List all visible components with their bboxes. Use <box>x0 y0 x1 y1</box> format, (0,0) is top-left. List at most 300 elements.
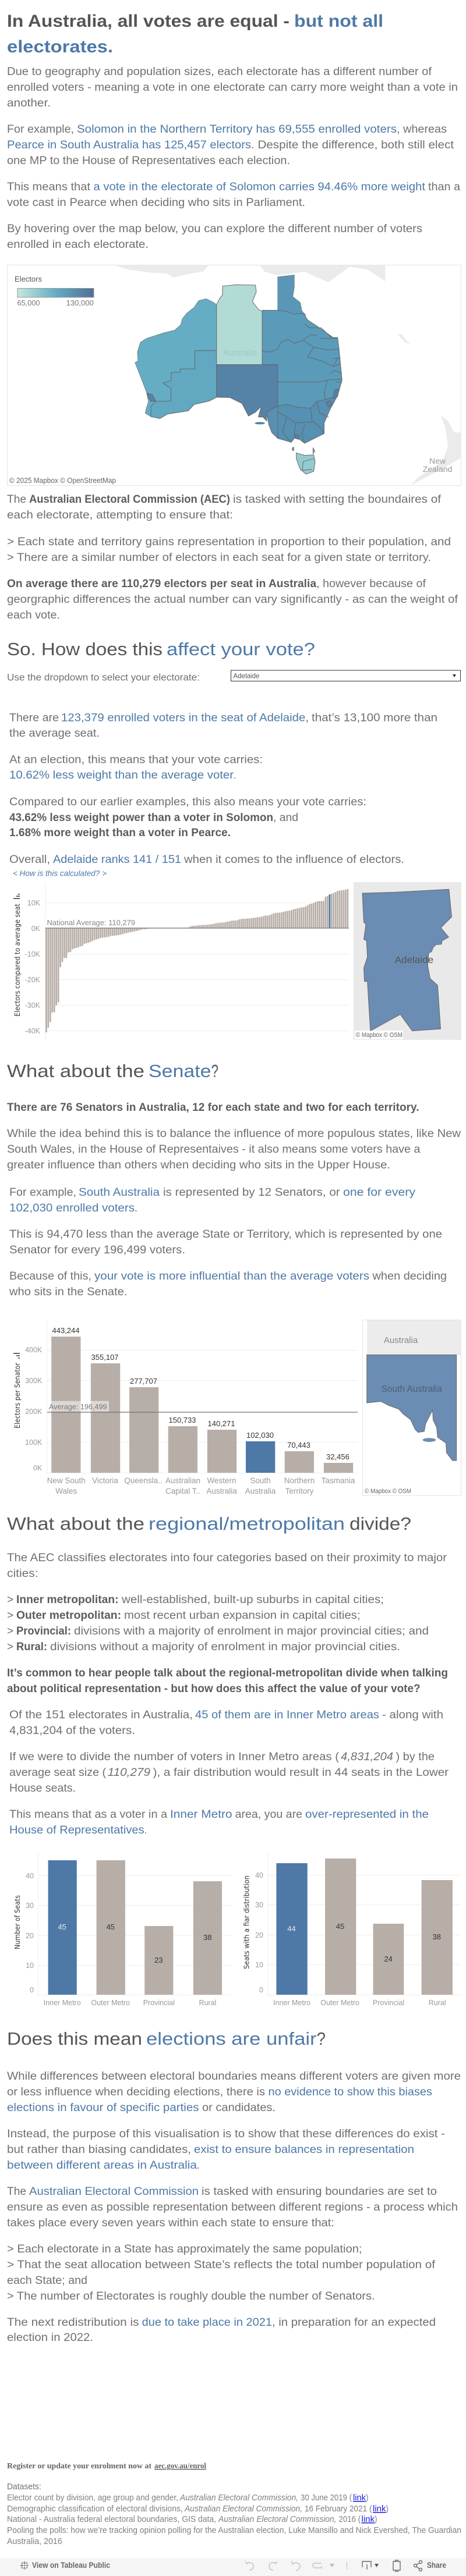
datasets list: Australia, 2016 <box>7 2536 62 2546</box>
enrolled voters text: There are <box>9 712 59 724</box>
y axis ticks: 400K <box>25 1346 43 1354</box>
average line and label: Average: 196,499 <box>49 1402 107 1411</box>
intro paragraph: enrolled voters - meaning a vote in one electorate can carry more weight than a vote in <box>7 81 458 94</box>
side map: Adelaide electorate: © Mapbox © OSM <box>356 1032 403 1039</box>
heading: regional/metropolitan <box>7 1513 411 1534</box>
AEC task paragraph: takes place every seven years within each state to ensure that: <box>7 2217 334 2229</box>
title: but not all <box>294 12 383 31</box>
heading: elections unfair: ? <box>317 2028 326 2049</box>
over-represented text: over-represented in the <box>305 1808 429 1821</box>
value labels: 38 <box>203 1933 212 1942</box>
balance paragraph: While the idea behind this is to balance the influence of more populous states, like New <box>7 1128 461 1140</box>
datasets list: Elector count by division, age group and gender, <box>7 2493 178 2503</box>
South Australia example: 102,030 enrolled voters <box>9 1202 135 1214</box>
x axis labels: Inner Metro <box>273 1999 310 2007</box>
heading: elections unfair: Does this mean <box>7 2028 142 2049</box>
map labels: Australia <box>223 348 257 358</box>
view on tableau public: View on Tableau Public <box>32 2560 110 2570</box>
x axis labels: Capital T.. <box>165 1487 200 1495</box>
no evidence paragraph <box>7 2070 461 2114</box>
datasets list: Australian Electoral Commission, <box>179 2493 298 2503</box>
side map: South Australia: © Mapbox © OSM <box>365 1488 411 1495</box>
value labels: 102,030 <box>246 1431 274 1440</box>
no evidence paragraph: no evidence to show this biases <box>268 2086 432 2098</box>
heading: regional/metropolitan: regional/metropolitan <box>149 1513 345 1534</box>
categories list: Inner metropolitan: <box>16 1594 119 1606</box>
heading: elections unfair: elections are unfair <box>146 2028 317 2049</box>
y axis title: Number of Seats <box>13 1895 22 1949</box>
icon: tableau logo <box>20 2561 29 2570</box>
categories intro: The AEC classifies electorates into four categories based on their proximity to major <box>7 1552 447 1564</box>
comparison text: Compared to our earlier examples, this also means your vote carries: <box>9 796 366 808</box>
value labels: 150,733 <box>169 1416 196 1424</box>
y axis title: Electors compared to average seat <box>13 904 22 1017</box>
categories list: > <box>7 1641 13 1653</box>
x axis labels: Australia <box>245 1487 276 1495</box>
heading: Senate: Senate <box>149 1061 211 1081</box>
x axis labels: Provincial <box>143 1999 175 2007</box>
national average line <box>45 928 349 929</box>
WA north and coast <box>135 299 217 418</box>
side map: South Australia: South Australia <box>382 1384 442 1394</box>
heading: Senate: What about the <box>7 1061 144 1081</box>
South Australia example: . <box>135 1202 137 1214</box>
map: electors by electorate: Zealand <box>423 464 452 474</box>
heading: regional/metropolitan: What about the <box>7 1513 144 1534</box>
x axis labels: Tasmania <box>322 1476 355 1485</box>
purpose paragraph: Instead, the purpose of this visualisation is to show that these differences do exist - <box>7 2128 445 2140</box>
AEC paragraph: is tasked with setting the boundaires of <box>233 493 442 506</box>
categories list: Outer metropolitan: <box>16 1609 121 1622</box>
y axis ticks: 300K <box>25 1377 43 1385</box>
y axis ticks: 20 <box>26 1932 34 1940</box>
South Australia example: one for every <box>343 1186 416 1199</box>
y axis ticks: 100K <box>25 1438 43 1447</box>
weight paragraph: This means that <box>7 181 91 193</box>
x axis labels: Australia <box>206 1487 237 1495</box>
categories list: divisions with a majority of enrolment in major provincial cities; and <box>74 1625 429 1637</box>
datasets list: 2016 ( <box>339 2514 361 2524</box>
y axis ticks: -20K <box>25 976 41 984</box>
categories list: Provincial: <box>16 1625 71 1637</box>
dropdown <box>231 670 460 681</box>
senators bold text: There are 76 Senators in Australia, 12 for each state and two for each territory. <box>7 1102 419 1114</box>
influence text: Because of this, <box>9 1270 91 1282</box>
map: electors by electorate <box>7 265 461 485</box>
value labels: 277,707 <box>130 1377 157 1385</box>
heading: affect your vote <box>7 639 315 659</box>
x axis labels: Northern <box>284 1476 315 1485</box>
average line and label <box>47 1401 358 1412</box>
y axis title: Seats with a fiar distribution <box>242 1875 250 1969</box>
purpose paragraph: exist to ensure balances in representation <box>194 2144 414 2156</box>
value labels <box>58 1923 212 1964</box>
regional divide question: It’s common to hear people talk about the regional-metropolitan divide when talking <box>7 1667 448 1679</box>
intro paragraph: Due to geography and population sizes, each electorate has a different number of <box>7 66 432 78</box>
x axis labels: South <box>250 1476 271 1485</box>
AEC paragraph <box>7 493 442 521</box>
side map: South Australia: Australia <box>384 1335 418 1345</box>
value labels: 23 <box>154 1956 163 1964</box>
influence text: when deciding <box>372 1270 447 1282</box>
chart: electors compared to average seat <box>13 882 349 1040</box>
value labels: 45 <box>336 1922 344 1931</box>
datasets list: Demographic classification of electoral divisions, <box>7 2504 183 2514</box>
redistribution list: > That the seat allocation between State’s reflects the total number population of <box>7 2259 436 2271</box>
title: In Australia, all votes are equal - <box>7 12 290 31</box>
bars <box>48 1860 222 1995</box>
Tasmania <box>296 453 315 474</box>
value labels: 24 <box>384 1955 393 1963</box>
value labels <box>52 1326 350 1461</box>
balance paragraph: greater influence than others when deciding who sits in the Upper House. <box>7 1159 390 1171</box>
categories intro <box>7 1552 447 1580</box>
fair distribution text: House seats. <box>9 1782 76 1795</box>
example paragraph: , whereas <box>397 123 447 136</box>
y axis ticks: 40 <box>26 1872 34 1880</box>
icon: share <box>414 2560 422 2571</box>
enrolled voters text: that’s 13,100 more than <box>312 712 437 724</box>
value labels <box>287 1922 441 1963</box>
y axis ticks: 10 <box>26 1962 34 1970</box>
AEC task paragraph: Australian Electoral Commission <box>29 2186 199 2198</box>
average state text: This is 94,470 less than the average State or Territory, which is represented by one <box>9 1228 442 1241</box>
map: electors by electorate: New <box>429 456 446 466</box>
heading: affect your vote: So. How does this <box>7 639 163 659</box>
rank text: Adelaide ranks 141 / 151 <box>53 854 181 866</box>
rank text: when it comes to the influence of electors. <box>183 854 404 866</box>
x axis labels: Western <box>207 1476 236 1485</box>
value labels: 355,107 <box>91 1353 119 1362</box>
redistribution list: each State; and <box>7 2275 87 2287</box>
vote weight text <box>9 754 263 781</box>
icon: refresh <box>313 2563 322 2568</box>
categories list: well-established, built-up suburbs in capital cities; <box>121 1594 384 1606</box>
sort icon <box>13 1353 20 1359</box>
sort icon <box>13 894 20 899</box>
South Australia example: South Australia <box>79 1186 160 1199</box>
AEC task paragraph <box>7 2186 458 2229</box>
bars <box>276 1859 453 1995</box>
hover paragraph <box>7 223 422 251</box>
datasets list: ) <box>386 2504 389 2514</box>
chart: number of seats <box>13 1852 232 2007</box>
value labels: 70,443 <box>287 1441 310 1449</box>
map: electors by electorate: © 2025 Mapbox © OpenStreetMap <box>9 477 116 485</box>
datasets list: ) <box>366 2493 368 2503</box>
y axis title: Electors per Senator <box>13 1363 22 1429</box>
y axis ticks <box>25 899 41 1035</box>
next redistribution paragraph: election in 2022. <box>7 2332 93 2344</box>
icon: dropdown arrow <box>330 2564 334 2567</box>
y axis ticks <box>255 1871 263 1994</box>
AEC paragraph: The <box>7 493 26 506</box>
enrolled voters text <box>9 712 437 740</box>
purpose paragraph: but rather than biasing candidates, <box>7 2144 191 2156</box>
datasets list: link <box>353 2493 366 2503</box>
AEC criteria list: > There are a similar number of electors in each seat for a given state or territory. <box>7 552 431 564</box>
side map: Adelaide electorate <box>354 882 461 1040</box>
categories list <box>7 1594 429 1653</box>
over-represented text: . <box>144 1824 147 1836</box>
average state text: Senator for every 196,499 voters. <box>9 1244 185 1256</box>
share label: Share <box>427 2560 446 2570</box>
example paragraph: Solomon in the Northern Territory has 69,555 enrolled voters <box>77 123 397 136</box>
over-represented text: House of Representatives <box>9 1824 144 1836</box>
heading: regional/metropolitan: divide? <box>350 1513 411 1534</box>
South Australia example <box>9 1186 416 1214</box>
toolbar <box>0 2558 466 2576</box>
legend: electors gradient: Electors <box>15 275 42 283</box>
y axis ticks: 30 <box>26 1902 34 1910</box>
categories list: > <box>7 1594 13 1606</box>
datasets list: ) <box>375 2514 377 2524</box>
value labels: 32,456 <box>326 1452 350 1461</box>
datasets heading: Datasets: <box>7 2482 41 2492</box>
redistribution list: > The number of Electorates is roughly double the number of Senators. <box>7 2290 375 2303</box>
Northern Territory <box>217 285 262 365</box>
average electors paragraph: georgraphic differences the actual number can vary significantly - as can the weight of <box>7 594 458 606</box>
y axis ticks: 0K <box>33 1464 43 1472</box>
heading: affect your vote: affect your vote? <box>167 639 315 659</box>
purpose paragraph: . <box>197 2159 199 2172</box>
eastern states <box>262 275 342 443</box>
icon: undo <box>245 2561 253 2570</box>
datasets list: Australian Electoral Commission, <box>184 2504 302 2514</box>
side map: Adelaide electorate: Adelaide <box>395 954 433 965</box>
x axis labels: Outer Metro <box>320 1999 359 2007</box>
datasets list: link <box>361 2514 375 2524</box>
x axis labels: Queensla.. <box>124 1476 163 1485</box>
icon: redo <box>269 2561 277 2570</box>
how is this calculated link: < How is this calculated? > <box>13 868 107 877</box>
y axis ticks: 0 <box>30 1986 34 1994</box>
balance paragraph <box>7 1128 461 1171</box>
vote weight text: At an election, this means that your vote carries: <box>9 754 263 766</box>
AEC criteria list <box>7 536 451 564</box>
x axis labels: Outer Metro <box>91 1999 130 2007</box>
y axis ticks: 10 <box>255 1961 263 1969</box>
South Australia example: is represented by 12 Senators, or <box>163 1186 340 1199</box>
over-represented text: This means that as a voter in a <box>9 1808 167 1821</box>
y axis ticks: 10K <box>27 899 41 907</box>
next redistribution paragraph: , in preparation for an expected <box>272 2316 436 2329</box>
national average label: National Average: 110,279 <box>47 918 135 927</box>
x axis labels: Inner Metro <box>44 1999 81 2007</box>
no evidence paragraph: elections in favour of specific parties <box>7 2102 199 2114</box>
weight paragraph: a vote in the electorate of Solomon carries 94.46% more weight <box>93 181 426 193</box>
AEC task paragraph: The <box>7 2186 26 2198</box>
x axis labels: New South <box>47 1476 86 1485</box>
influence text <box>9 1270 447 1298</box>
bars <box>46 889 348 1032</box>
hover paragraph: By hovering over the map below, you can explore the different number of voters <box>7 223 422 235</box>
average electors paragraph: , however because of <box>316 578 426 590</box>
y axis ticks: -30K <box>25 1001 41 1010</box>
no evidence paragraph: While differences between electoral boundaries means different voters are given more <box>7 2070 461 2083</box>
example paragraph: one MP to the House of Representatives each election. <box>7 155 290 167</box>
value labels: 45 <box>58 1923 66 1931</box>
chart: seats with a fair distribution <box>242 1852 461 2007</box>
intro paragraph: another. <box>7 97 51 109</box>
fair distribution text <box>9 1751 449 1795</box>
over-represented text: Inner Metro <box>170 1808 232 1821</box>
rank text: Overall, <box>9 854 50 866</box>
x axis labels: Provincial <box>373 1999 404 2007</box>
over-represented text: area, you are <box>235 1808 302 1821</box>
fair distribution text: 4,831,204 <box>341 1751 393 1763</box>
separator <box>346 2562 347 2569</box>
next redistribution paragraph: due to take place in 2021 <box>142 2316 272 2329</box>
y axis ticks: -10K <box>25 950 41 958</box>
x axis labels: Victoria <box>92 1476 118 1485</box>
title <box>7 12 383 56</box>
heading: Senate <box>7 1061 218 1081</box>
legend: electors gradient: 130,000 <box>66 299 94 307</box>
inner metro text: 4,831,204 of the voters. <box>9 1725 135 1737</box>
weight paragraph: than a <box>428 181 460 193</box>
AEC criteria list: > Each state and territory gains representation in proportion to their population, and <box>7 536 451 548</box>
value labels: 443,244 <box>52 1326 79 1335</box>
weight paragraph <box>7 181 460 209</box>
inner metro text: Of the 151 electorates in Australia, <box>9 1709 193 1721</box>
vote weight text: 10.62% less weight than the average voter <box>9 769 234 781</box>
enrolled voters text: 123,379 enrolled voters in the seat of Adelaide, <box>61 712 309 724</box>
x axis labels: Territory <box>285 1487 314 1495</box>
categories list: divisions without a majority of enrolment in major provincial cities. <box>50 1641 400 1653</box>
rank text <box>9 854 404 866</box>
influence text: who sits in the Senate. <box>9 1286 127 1298</box>
y axis ticks: 30 <box>255 1901 263 1909</box>
datasets list: National - Australia federal electoral boundaries, GIS data, <box>7 2514 216 2524</box>
hover paragraph: enrolled in each electorate. <box>7 239 149 251</box>
AEC paragraph: Australian Electoral Commission (AEC) <box>29 493 230 506</box>
value labels: 44 <box>287 1924 296 1933</box>
balance paragraph: South Wales, in the House of Representaives - it also means some voters have a <box>7 1143 421 1156</box>
y axis ticks <box>26 1872 34 1994</box>
categories list: Rural: <box>16 1641 47 1653</box>
dropdown: Adelaide <box>233 671 260 680</box>
intro paragraph <box>7 66 458 109</box>
icon: download arrow <box>375 2564 379 2567</box>
regional divide question <box>7 1667 448 1695</box>
icon: fullscreen <box>393 2560 400 2571</box>
redistribution list <box>7 2243 436 2303</box>
x axis labels <box>44 1999 216 2007</box>
comparison text <box>9 796 366 839</box>
average electors paragraph <box>7 578 458 621</box>
enrolment call to action: Register or update your enrolment now at <box>7 2462 151 2471</box>
categories intro: cities: <box>7 1568 38 1580</box>
weight paragraph: vote cast in Pearce when deciding who sits in Parliament. <box>7 197 305 209</box>
inner metro text: 45 of them are in Inner Metro areas <box>195 1709 379 1721</box>
enrolled voters text: the average seat. <box>9 727 100 740</box>
comparison text: 43.62% less weight power than a voter in Solomon <box>9 812 273 824</box>
x axis labels: Wales <box>55 1487 77 1495</box>
categories list: most recent urban expansion in capital cities; <box>124 1609 360 1622</box>
redistribution list: > Each electorate in a State has approximately the same population; <box>7 2243 362 2255</box>
example paragraph: . Despite the difference, both still elect <box>251 139 454 151</box>
vote weight text: . <box>234 769 236 781</box>
categories list: > <box>7 1625 13 1637</box>
average state text <box>9 1228 442 1256</box>
heading: elections unfair <box>7 2028 326 2049</box>
chart: electors per senator <box>13 1320 358 1495</box>
y axis ticks: 0K <box>31 925 41 933</box>
no evidence paragraph: or less influence when deciding elections, there is <box>7 2086 265 2098</box>
fair distribution text: ), a fair distribution would result in 44 seats in the Lower <box>153 1767 449 1779</box>
y axis ticks <box>25 1346 43 1472</box>
y axis ticks: 200K <box>25 1408 43 1416</box>
next redistribution paragraph <box>7 2316 436 2344</box>
fair distribution text: ) by the <box>396 1751 435 1763</box>
x axis labels: Australian <box>165 1476 200 1485</box>
y axis ticks: 0 <box>259 1986 263 1994</box>
fair distribution text: 110,279 <box>108 1767 150 1779</box>
average electors paragraph: each vote. <box>7 609 60 621</box>
WA south-east electorate <box>151 351 217 418</box>
x axis labels <box>273 1999 446 2007</box>
fair distribution text: average seat size ( <box>9 1767 107 1779</box>
next redistribution paragraph: The next redistribution is <box>7 2316 139 2329</box>
datasets list <box>7 2493 461 2546</box>
categories list: > <box>7 1609 13 1622</box>
example paragraph: Pearce in South Australia has 125,457 electors <box>7 139 251 151</box>
electorate boundaries <box>262 310 342 443</box>
average electors paragraph: On average there are 110,279 electors per seat in Australia <box>7 578 316 590</box>
side map: South Australia <box>362 1320 461 1495</box>
value labels: 45 <box>106 1923 115 1931</box>
example paragraph <box>7 123 454 167</box>
datasets list: 30 June 2019 ( <box>301 2493 352 2503</box>
heading: Senate: ? <box>211 1061 218 1081</box>
title: electorates. <box>7 37 113 56</box>
AEC task paragraph: is tasked with ensuring boundaries are set to <box>202 2186 437 2198</box>
influence text: your vote is more influential than the average voters <box>94 1270 369 1282</box>
x axis labels: Rural <box>429 1999 446 2007</box>
highlighted bar: Adelaide <box>329 894 330 928</box>
inner metro text <box>9 1709 443 1737</box>
purpose paragraph <box>7 2128 445 2172</box>
x axis labels: Rural <box>199 1999 216 2007</box>
no evidence paragraph: or candidates. <box>202 2102 276 2114</box>
icon: revert <box>292 2561 300 2571</box>
enrolment call to action: aec.gov.au/enrol <box>154 2462 206 2471</box>
comparison text: , and <box>273 812 298 824</box>
inner metro text: - along with <box>382 1709 443 1721</box>
y axis ticks: -40K <box>25 1027 41 1035</box>
dropdown label: Use the dropdown to select your electorate: <box>7 673 200 683</box>
icon: download <box>362 2561 371 2570</box>
legend: electors gradient <box>15 275 94 307</box>
South Australia <box>217 365 278 421</box>
AEC task paragraph: ensure as even as possible representation between different regions - a process which <box>7 2201 458 2213</box>
legend: electors gradient: 65,000 <box>17 299 40 307</box>
over-represented text <box>9 1808 429 1836</box>
fair distribution text: If we were to divide the number of voters in Inner Metro areas ( <box>9 1751 340 1763</box>
purpose paragraph: between different areas in Australia <box>7 2159 197 2172</box>
regional divide question: about political representation - but how does this affect the value of your vote? <box>7 1683 421 1695</box>
datasets list: Australian Electoral Commission, <box>218 2514 337 2524</box>
datasets list: 16 February 2021 ( <box>305 2504 372 2514</box>
x axis labels <box>47 1476 355 1495</box>
bars <box>51 1337 353 1473</box>
y axis ticks: 40 <box>255 1871 263 1879</box>
South Australia example: For example, <box>9 1186 76 1199</box>
example paragraph: For example, <box>7 123 74 136</box>
comparison text: 1.68% more weight than a voter in Pearce. <box>9 827 231 839</box>
y axis ticks: 20 <box>255 1931 263 1939</box>
